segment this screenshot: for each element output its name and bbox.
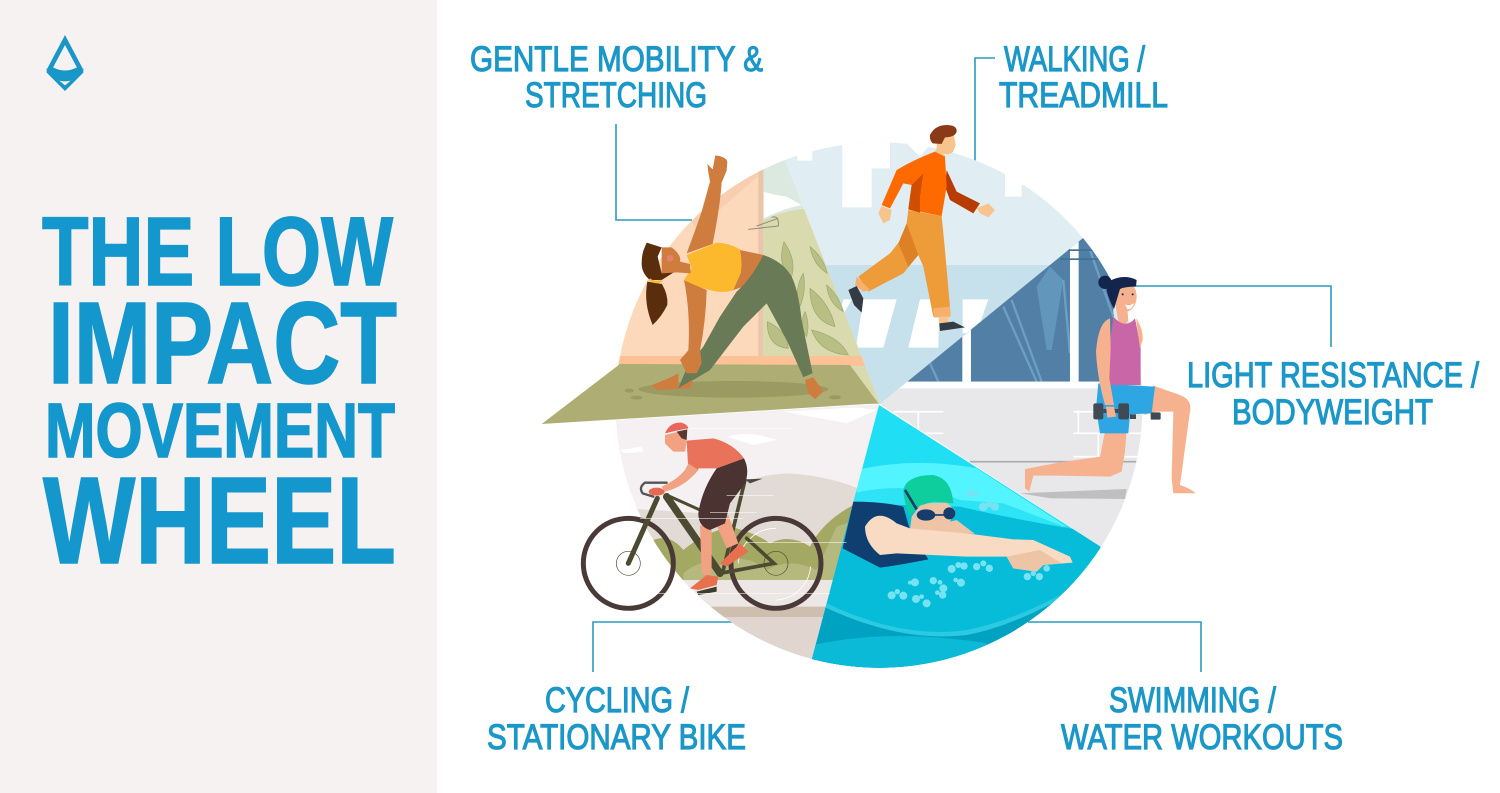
yoga mat bbox=[542, 364, 878, 424]
illustration: swimmer bbox=[843, 475, 1073, 607]
label: gentle mobility and stretching: STRETCHING bbox=[525, 76, 707, 115]
wedge: swimming scene bbox=[800, 400, 1107, 673]
wall bricks and floor line bbox=[893, 412, 1143, 462]
label: swimming water workouts: SWIMMING / bbox=[1109, 681, 1276, 720]
illustration: woman lunging with dumbbells bbox=[1020, 276, 1196, 499]
label: light resistance bodyweight bbox=[1187, 356, 1479, 432]
label: swimming water workouts: WATER WORKOUTS bbox=[1061, 718, 1343, 757]
label: walking treadmill bbox=[999, 40, 1168, 115]
illustration: cyclist on bike bbox=[583, 423, 847, 608]
wedge: cycling scene background bbox=[616, 404, 880, 659]
label: swimming water workouts bbox=[1061, 681, 1343, 757]
wedge: walking scene background bbox=[785, 142, 1083, 404]
title: The Low Impact Movement Wheel: MOVEMENT bbox=[45, 388, 395, 474]
icon: brand drop logo bbox=[47, 40, 83, 91]
title: The Low Impact Movement Wheel: THE LOW bbox=[42, 197, 393, 306]
speed lines bbox=[640, 428, 847, 593]
illustration: woman in triangle yoga pose bbox=[642, 155, 823, 399]
leader lines connecting labels to wedges bbox=[593, 58, 1331, 672]
label: cycling stationary bike: STATIONARY BIKE bbox=[487, 718, 746, 757]
panel: title sidebar bbox=[0, 0, 437, 793]
label: walking treadmill: TREADMILL bbox=[999, 76, 1168, 115]
water bubbles bbox=[888, 489, 1050, 607]
label: cycling stationary bike bbox=[487, 681, 746, 757]
label: cycling stationary bike: CYCLING / bbox=[545, 681, 689, 720]
wedge: gentle mobility scene with mat bbox=[542, 160, 880, 424]
title: The Low Impact Movement Wheel bbox=[42, 197, 397, 590]
bike wheels bbox=[583, 518, 821, 608]
label: walking treadmill: WALKING / bbox=[1004, 40, 1145, 79]
illustration: walking man bbox=[848, 125, 995, 331]
leaves bbox=[767, 242, 848, 355]
wedge: light resistance scene background bbox=[880, 230, 1160, 550]
bike frame bbox=[628, 480, 774, 573]
label: gentle mobility and stretching bbox=[470, 40, 763, 115]
title: The Low Impact Movement Wheel: IMPACT bbox=[48, 278, 397, 408]
label: light resistance bodyweight: BODYWEIGHT bbox=[1232, 393, 1433, 432]
label: gentle mobility and stretching: GENTLE MOBILITY & bbox=[470, 40, 763, 79]
title: The Low Impact Movement Wheel: WHEEL bbox=[43, 453, 396, 590]
